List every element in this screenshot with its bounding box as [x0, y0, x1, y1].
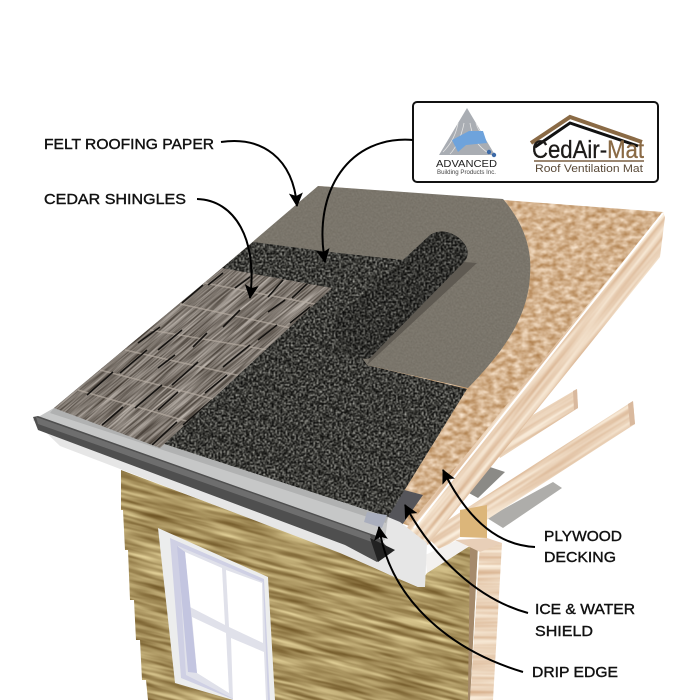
- label: plywood decking: PLYWOOD: [544, 528, 622, 545]
- logo box: [413, 102, 658, 182]
- arrow: ice and water shield: [405, 505, 528, 613]
- rake board: [405, 212, 665, 545]
- cedar-mat ventilation layer: [50, 235, 475, 525]
- corner post: [468, 543, 502, 700]
- arrow: logo to mat: [322, 140, 413, 262]
- cedar shingles: [54, 268, 332, 448]
- label: drip edge: DRIP EDGE: [532, 664, 618, 681]
- Advanced text: ADVANCED: [436, 159, 497, 170]
- label: decking: DECKING: [544, 549, 616, 566]
- plywood decking: [300, 180, 670, 530]
- white soffit: [425, 540, 468, 573]
- label: cedar shingles: CEDAR SHINGLES: [44, 191, 186, 208]
- label: felt roofing paper: FELT ROOFING PAPER: [44, 136, 214, 153]
- arrow: plywood decking: [443, 470, 535, 547]
- arrow: drip edge: [379, 527, 523, 672]
- label: shield: SHIELD: [535, 623, 593, 640]
- felt roofing paper: [215, 180, 535, 395]
- shingle course lines: [78, 283, 325, 425]
- Building Products text: Building Products Inc.: [437, 170, 496, 176]
- ice and water shield: [372, 487, 423, 535]
- Roof Ventilation Mat text: Roof Ventilation Mat: [535, 163, 643, 175]
- beam block: [455, 505, 502, 552]
- wall with wood siding: [121, 470, 478, 700]
- arrow: felt roofing paper: [221, 141, 297, 206]
- roll shadow on felt: [367, 262, 477, 365]
- CedAir-Mat wordmark: CedAir-Mat: [532, 136, 644, 164]
- icon: CedAir roof chevron: [531, 117, 642, 147]
- label: ice and water: ICE & WATER: [535, 601, 635, 618]
- icon: Advanced Building Products triangle: [439, 108, 496, 157]
- window: [158, 528, 275, 700]
- gutter flashing: [33, 408, 427, 587]
- rolled mat: [333, 232, 468, 359]
- rafters behind the roof: [425, 389, 635, 550]
- arrow: cedar shingles: [197, 199, 252, 298]
- gutter: [33, 416, 395, 562]
